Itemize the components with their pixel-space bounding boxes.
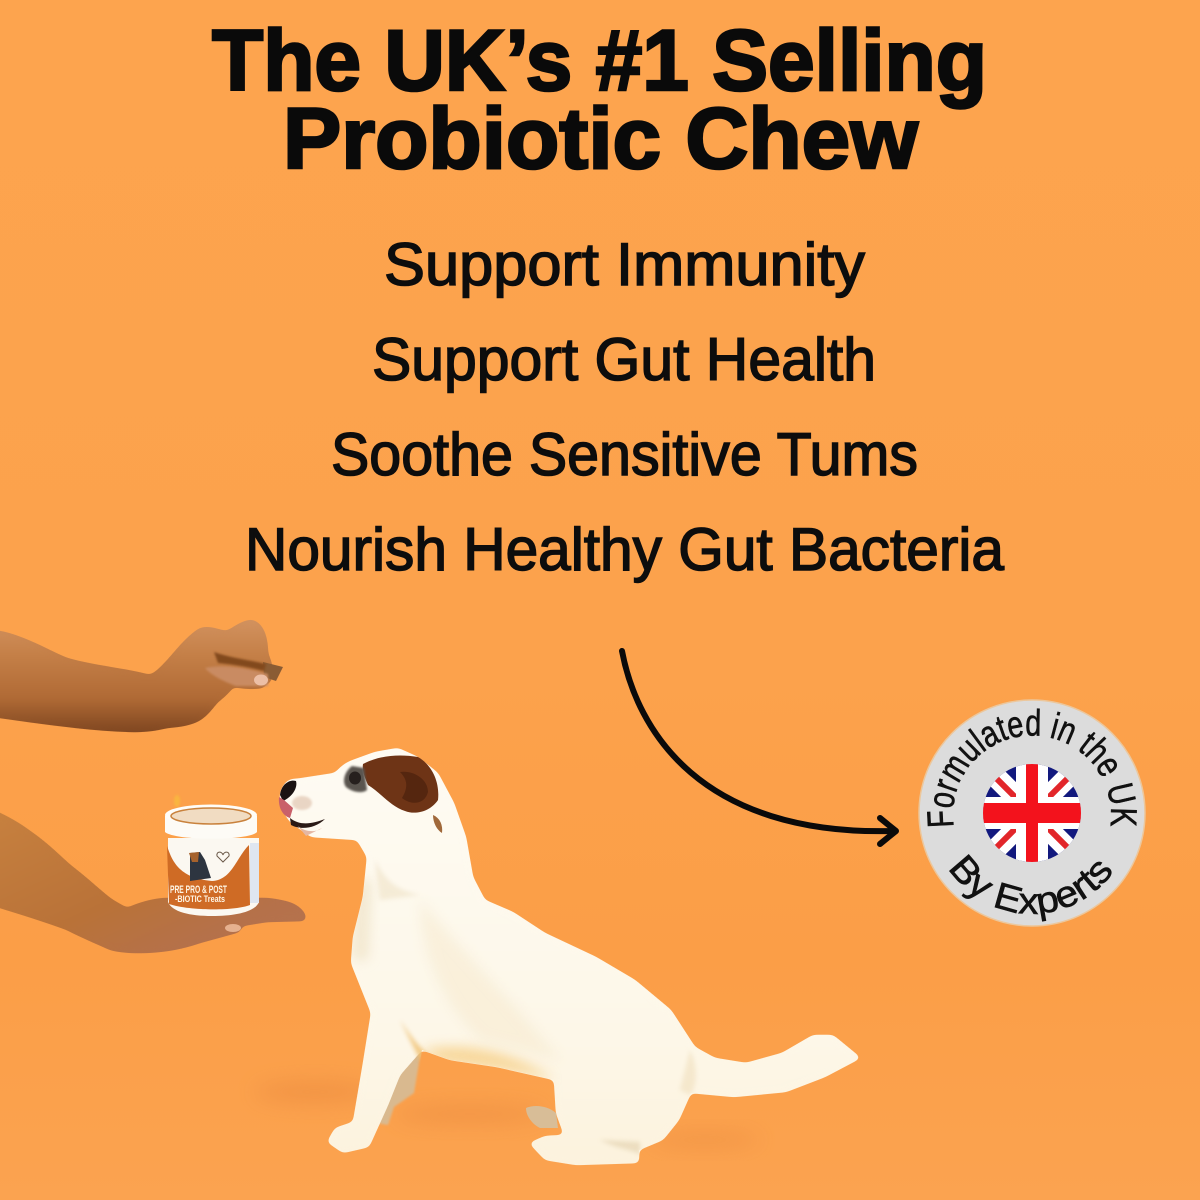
nose	[280, 781, 296, 801]
thumb highlight	[205, 666, 268, 686]
badge text: bottom arc: By Experts	[949, 854, 1112, 922]
mouth	[290, 818, 325, 828]
floor shadows	[255, 1081, 760, 1147]
eye	[349, 772, 361, 784]
product jar	[165, 795, 259, 916]
product jar: -BIOTIC Treats	[175, 894, 225, 905]
benefits list: Support Gut Health	[372, 326, 876, 393]
fur shading	[352, 860, 696, 1155]
jack russell dog	[279, 748, 861, 1165]
jar side panel	[250, 843, 259, 903]
benefits list	[245, 231, 1005, 583]
title	[212, 13, 987, 187]
jar label text: PRE PRO & POST	[170, 884, 227, 896]
tongue	[279, 797, 293, 818]
neck spot	[433, 815, 442, 833]
jar dog illustration	[190, 852, 211, 881]
eye patch	[344, 766, 367, 792]
brown ear patch	[363, 755, 438, 813]
badge: formulated in the UK	[918, 699, 1146, 927]
orange mark behind lid	[174, 795, 180, 807]
lower arm and open hand	[0, 798, 306, 953]
icon: union jack flag	[983, 764, 1081, 862]
thumbnail	[225, 924, 241, 932]
jar lid	[165, 816, 257, 839]
jar heart logo	[217, 852, 229, 862]
arrow pointing to badge	[622, 651, 896, 844]
back paw	[526, 1106, 558, 1128]
benefits list: Soothe Sensitive Tums	[331, 421, 918, 488]
upper arm and hand holding a treat	[0, 620, 283, 732]
benefits list: Nourish Healthy Gut Bacteria	[245, 516, 1005, 583]
dog body	[280, 748, 861, 1165]
benefits list: Support Immunity	[384, 231, 865, 298]
title: The UK’s #1 Selling	[212, 13, 987, 109]
finger gap shadow	[214, 652, 266, 671]
badge text: top arc: Formulated in the UK	[927, 708, 1137, 826]
jar orange label	[167, 845, 250, 909]
far front leg	[376, 1040, 422, 1125]
muzzle speckles	[292, 796, 312, 810]
fingernail	[254, 674, 268, 686]
treat	[263, 662, 283, 681]
title: Probiotic Chew	[283, 91, 919, 187]
